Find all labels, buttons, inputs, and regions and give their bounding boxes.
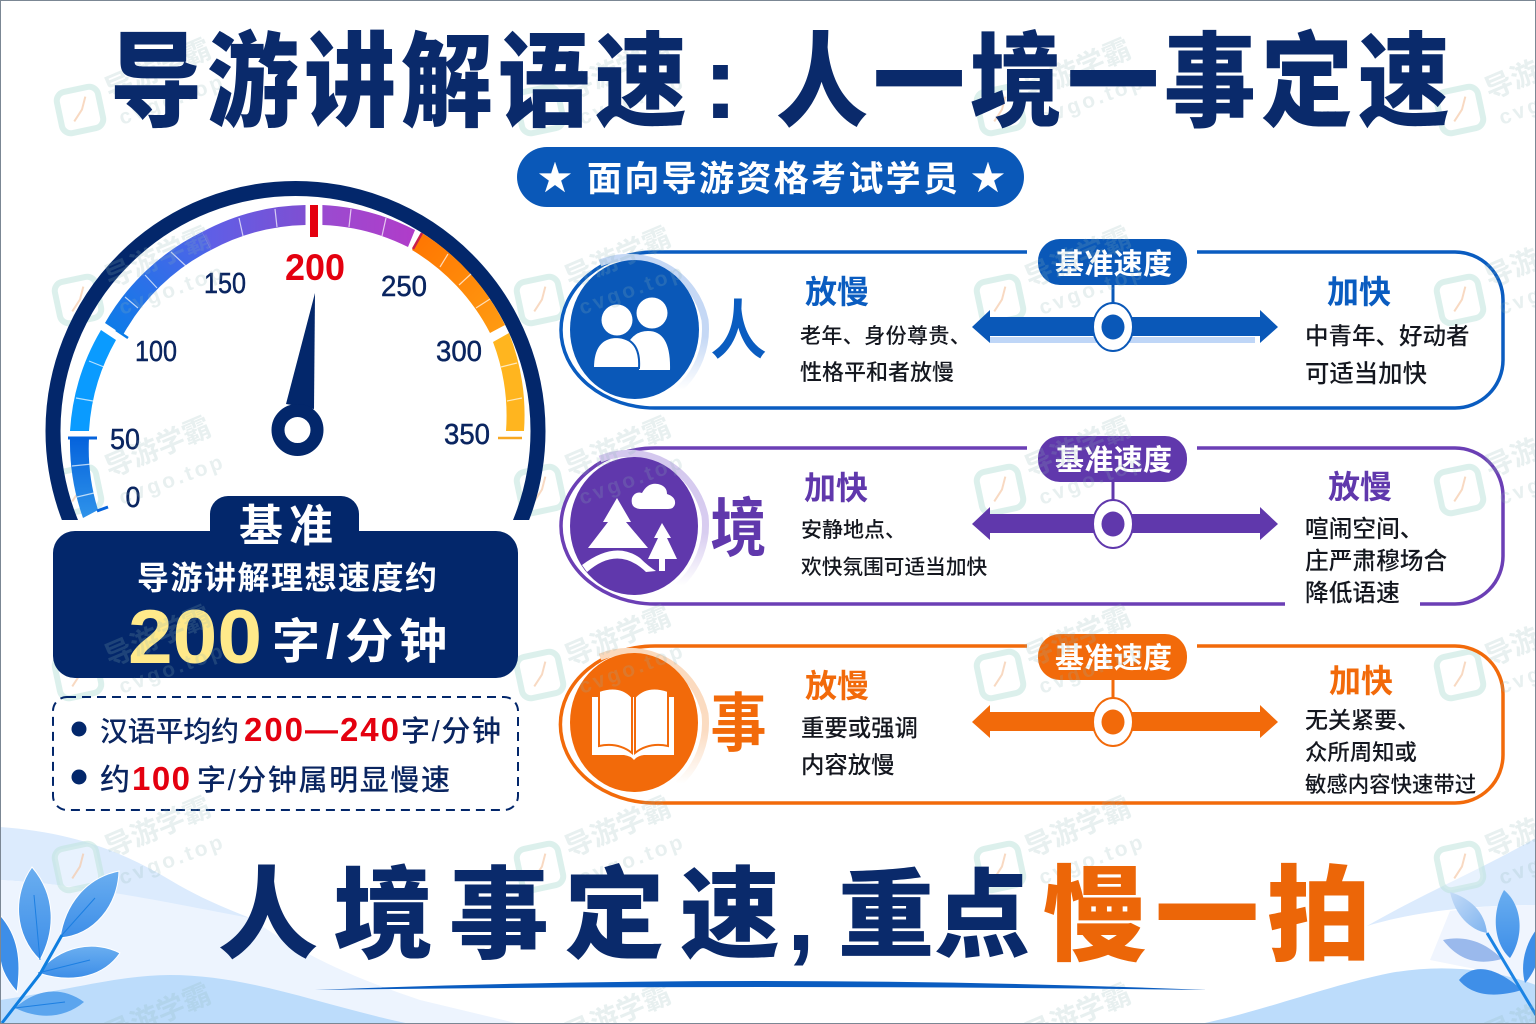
watermark text layer: 导游学霸	[100, 221, 215, 294]
notes box: 约	[100, 764, 130, 797]
left text: slow down: 性格平和者放慢	[800, 360, 954, 385]
watermark text layer: cvgo.top	[116, 639, 228, 699]
panel: 事	[560, 634, 1503, 803]
watermark text layer: cvgo.top	[576, 830, 688, 890]
left text: slow down: 重要或强调	[801, 715, 918, 741]
left text: speed up: 安静地点、	[801, 519, 906, 542]
watermark text layer: 导游学霸	[560, 411, 675, 484]
watermark text layer: 导游学霸	[560, 221, 675, 294]
gauge labels: 150	[204, 268, 246, 300]
closing slogan: 慢一拍	[1043, 859, 1379, 975]
benchmark card: 基准	[239, 502, 339, 551]
watermark text layer: cvgo.top	[1036, 830, 1148, 890]
right text: speed up: 无关紧要、	[1305, 707, 1420, 733]
left text: slow down	[800, 274, 971, 385]
gauge labels	[110, 247, 490, 514]
gauge labels: 0	[126, 482, 140, 514]
decoration: right leaf branch	[1443, 890, 1536, 1015]
right text: speed up: 加快	[1327, 274, 1391, 310]
gauge labels: 300	[436, 336, 482, 368]
speed arrow	[972, 674, 1278, 746]
right text: slow down: 放慢	[1328, 469, 1392, 505]
benchmark card: 200	[128, 595, 262, 680]
icon: mountains	[570, 457, 698, 595]
watermark text layer: 导游学霸	[1020, 33, 1135, 106]
watermark text layer: cvgo.top	[1036, 639, 1148, 699]
watermark text layer: 导游学霸	[1020, 221, 1135, 294]
watermark text layer: 导游学霸	[1020, 791, 1135, 864]
badge: base speed	[1038, 634, 1187, 680]
subtitle pill: ★	[971, 160, 1005, 198]
notes box: 100	[132, 760, 190, 797]
watermark text layer: 导游学霸	[100, 600, 215, 673]
decoration: left leaf branch	[0, 867, 120, 1023]
speed arrow	[972, 280, 1278, 351]
watermark text layer: cvgo.top	[1036, 260, 1148, 320]
gauge segment 0-50	[70, 438, 98, 518]
watermark text layer: 导游学霸	[100, 411, 215, 484]
gauge labels: 350	[444, 419, 490, 451]
right text: slow down: 庄严肃穆场合	[1305, 548, 1447, 575]
watermark text layer: cvgo.top	[576, 70, 688, 130]
gauge outer ring	[46, 181, 546, 520]
gauge segment 300-350	[493, 333, 525, 431]
watermark text layer: 导游学霸	[100, 791, 215, 864]
heading: 境: 境	[711, 492, 766, 565]
left text: speed up: 加快	[804, 470, 868, 506]
badge: base speed: 基准速度	[1055, 642, 1172, 675]
watermark text layer: cvgo.top	[116, 260, 228, 320]
watermark text layer: cvgo.top	[576, 639, 688, 699]
notes box: 字/分钟属明显慢速	[197, 764, 450, 797]
gauge needle	[278, 293, 317, 450]
gauge labels: 50	[110, 424, 140, 456]
right text: speed up: 可适当加快	[1305, 361, 1427, 388]
left text: slow down	[801, 668, 918, 778]
benchmark card: 字/分钟	[272, 616, 447, 669]
watermark text layer: cvgo.top	[1036, 450, 1148, 510]
benchmark card	[53, 496, 518, 680]
subtitle pill: 面向导游资格考试学员	[587, 160, 958, 199]
slogan underline swoosh	[315, 981, 1207, 990]
watermark text layer: 导游学霸	[1020, 600, 1135, 673]
panel: 境	[561, 436, 1503, 608]
right text: speed up: 众所周知或	[1305, 740, 1417, 765]
right text: speed up: 中青年、好动者	[1305, 323, 1470, 349]
watermark text layer: cvgo.top	[116, 70, 228, 130]
watermark text layer: 导游学霸	[560, 600, 675, 673]
left text: slow down: 放慢	[805, 274, 869, 310]
notes box	[53, 697, 518, 810]
left text: slow down: 内容放慢	[801, 752, 895, 778]
title: 人一境一事定速	[776, 25, 1455, 140]
subtitle pill: ★	[538, 160, 572, 198]
gauge segment 100-150	[105, 232, 211, 335]
right text: speed up	[1305, 274, 1470, 388]
watermark text layer: 导游学霸	[1020, 411, 1135, 484]
title: 导游讲解语速	[110, 25, 692, 140]
right text: slow down: 喧闹空间、	[1305, 516, 1423, 543]
right text: speed up: 加快	[1329, 663, 1393, 699]
notes box: 字/分钟	[401, 715, 501, 748]
badge: base speed	[1038, 239, 1187, 285]
right text: slow down	[1305, 469, 1447, 607]
heading: 事: 事	[711, 687, 766, 760]
badge: base speed: 基准速度	[1055, 248, 1172, 281]
gauge segment 200-250	[322, 205, 415, 247]
right text: slow down: 降低语速	[1305, 580, 1400, 607]
watermark text layer: cvgo.top	[116, 450, 228, 510]
panel: 人	[561, 239, 1503, 408]
closing slogan	[218, 859, 1379, 975]
icon: open book	[570, 653, 698, 792]
gauge segment 50-100	[70, 330, 116, 431]
watermark text layer: cvgo.top	[116, 830, 228, 890]
icon: people	[570, 260, 699, 399]
left text: speed up	[801, 470, 988, 579]
heading: 人: 人	[711, 294, 766, 367]
benchmark card: 导游讲解理想速度约	[137, 560, 437, 596]
left text: speed up: 欢快氛围可适当加快	[801, 556, 988, 579]
watermark text layer: 导游学霸	[560, 791, 675, 864]
speed arrow	[972, 476, 1278, 548]
badge: base speed	[1038, 436, 1187, 482]
gauge segment 150-200	[202, 205, 306, 250]
gauge labels: 100	[135, 336, 177, 368]
gauge segment 250-300	[412, 233, 505, 333]
watermark text layer: 导游学霸	[100, 33, 215, 106]
watermark text layer: cvgo.top	[1036, 70, 1148, 130]
gauge red mark 200	[310, 205, 318, 237]
watermark icons	[53, 85, 1485, 892]
notes box: 200—240	[244, 711, 399, 748]
watermark text layer: cvgo.top	[576, 450, 688, 510]
notes box: 汉语平均约	[100, 716, 239, 747]
closing slogan: 人境事定速	[218, 860, 796, 972]
right text: speed up	[1305, 663, 1476, 797]
bottom background waves	[0, 827, 1536, 1024]
title: :	[703, 24, 738, 141]
badge: base speed: 基准速度	[1055, 444, 1172, 477]
closing slogan: 重点	[838, 863, 1030, 970]
watermark text layer: 导游学霸	[560, 33, 675, 106]
title	[110, 24, 1455, 141]
gauge labels: 250	[381, 271, 427, 303]
closing slogan: ,	[787, 860, 815, 972]
left text: slow down: 放慢	[805, 668, 869, 704]
right text: speed up: 敏感内容快速带过	[1305, 773, 1476, 797]
subtitle pill	[517, 147, 1024, 207]
speedometer gauge	[46, 181, 546, 520]
left text: slow down: 老年、身份尊贵、	[800, 325, 971, 348]
watermark text layer: cvgo.top	[576, 260, 688, 320]
gauge labels: 200	[285, 247, 345, 288]
